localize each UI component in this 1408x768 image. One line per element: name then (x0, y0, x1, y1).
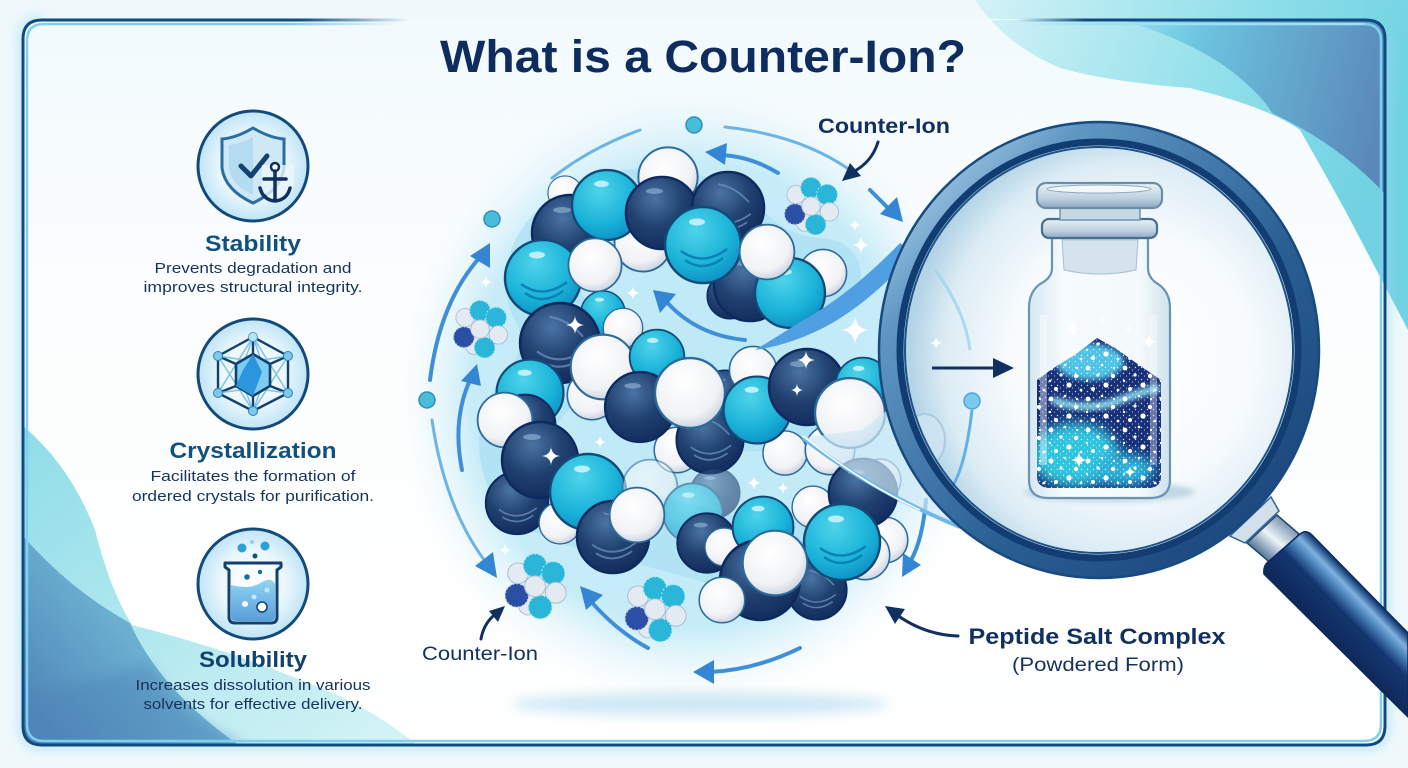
powder (1037, 338, 1161, 488)
text: stability description (144, 260, 362, 296)
label: counter-ion bottom (422, 606, 538, 665)
label: counter-ion top (818, 115, 950, 181)
arrow: to top cluster (842, 142, 878, 181)
counter-ion clusters (454, 177, 839, 642)
bottom-left wave (22, 425, 418, 746)
sparkles (480, 219, 870, 556)
label: peptide salt complex: Peptide Salt Complex (968, 624, 1226, 649)
text: solubility description: solvents for effective delivery. (144, 696, 362, 713)
bottom-left dark wave (22, 535, 240, 746)
label: peptide salt complex: (Powdered Form) (1012, 655, 1184, 676)
peptide glow background (400, 85, 980, 705)
icon: crystal lattice (198, 319, 308, 429)
feature: crystallization (132, 319, 374, 505)
handle (1264, 532, 1408, 717)
text: solubility description: Increases dissolution in various (136, 677, 370, 694)
lens reflection arcs (905, 270, 980, 490)
arrow: to bottom cluster (481, 606, 505, 639)
label: peptide salt complex (885, 606, 1226, 676)
peptide chain (478, 147, 908, 623)
orbit arrows (430, 127, 926, 684)
lens (903, 144, 1295, 556)
title: What is a Counter-Ion? (440, 31, 966, 82)
heading: stability: Stability (205, 231, 302, 256)
text: stability description: improves structural integrity. (144, 279, 362, 296)
ground shadow (510, 692, 890, 716)
text: crystallization description (132, 468, 374, 505)
text: stability description: Prevents degradation and (154, 260, 352, 277)
top-right outer wave (975, 0, 1408, 330)
arrow: to complex (885, 606, 958, 636)
lens rim (890, 132, 1308, 568)
arrow into vial (932, 358, 1014, 378)
feature: stability (144, 111, 362, 296)
label: counter-ion top: Counter-Ion (818, 115, 950, 138)
top-right dark wave (1128, 22, 1384, 192)
vial (1025, 183, 1195, 502)
feature: solubility (136, 529, 370, 713)
text: solubility description (136, 677, 370, 713)
label: counter-ion bottom: Counter-Ion (422, 644, 538, 665)
magnifying glass (879, 122, 1408, 717)
icon: beaker with bubbles (198, 529, 308, 639)
text: crystallization description: Facilitates the formation of (150, 468, 356, 485)
ion dots (419, 117, 702, 408)
text: crystallization description: ordered crystals for purification. (132, 488, 374, 505)
icon: shield and anchor (198, 111, 308, 221)
heading: crystallization: Crystallization (170, 438, 336, 463)
zoom swoosh: lower (803, 400, 960, 527)
zoom swoosh: upper (755, 243, 915, 350)
handle ferrule (1230, 497, 1299, 566)
top-right wave (990, 20, 1384, 284)
heading: solubility: Solubility (199, 647, 308, 672)
